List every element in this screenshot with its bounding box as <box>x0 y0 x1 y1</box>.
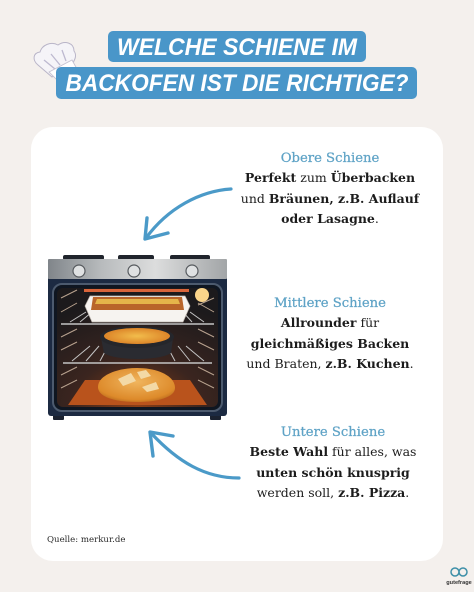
rack 1 <box>61 312 214 324</box>
oven light <box>195 288 209 302</box>
oven interior <box>57 288 218 407</box>
text block: untere Schiene: unten schön knusprig <box>256 465 410 480</box>
text block: mittlere Schiene <box>246 296 414 371</box>
text block: obere Schiene: Obere Schiene <box>281 151 379 166</box>
title line 2: BACKOFEN IST DIE RICHTIGE? <box>66 70 409 97</box>
title <box>56 31 417 99</box>
text block: untere Schiene <box>250 425 416 500</box>
arrow: to upper rack <box>145 189 231 239</box>
cake tin <box>100 326 174 359</box>
oven body <box>48 276 227 416</box>
heating element <box>84 289 189 292</box>
rack 2 <box>63 346 212 363</box>
control panel <box>48 259 227 279</box>
lasagne dish <box>85 296 190 322</box>
oven feet <box>53 414 221 420</box>
logo: gutefrage: gutefrage <box>446 580 472 586</box>
arrow: to lower rack <box>150 432 239 478</box>
source note: Quelle: merkur.de <box>47 535 125 545</box>
side rails <box>61 290 214 388</box>
text block: obere Schiene: oder Lasagne. <box>281 211 379 226</box>
panel: main card <box>31 127 443 561</box>
text block: obere Schiene: Perfekt zum Überbacken <box>245 169 415 185</box>
icon: chef hat <box>34 43 77 80</box>
illustration: oven <box>48 255 227 420</box>
oven door frame <box>53 284 222 411</box>
logo: gutefrage <box>446 568 472 586</box>
bread <box>98 368 175 402</box>
text block: untere Schiene: werden soll, z.B. Pizza. <box>257 485 409 500</box>
text block: mittlere Schiene: Mittlere Schiene <box>274 296 386 311</box>
oven floor <box>68 380 207 405</box>
text block: obere Schiene: und Bräunen, z.B. Auflauf <box>241 191 421 206</box>
text block: untere Schiene: Untere Schiene <box>281 425 385 440</box>
title line 1: WELCHE SCHIENE IM <box>117 34 358 61</box>
text block: mittlere Schiene: und Braten, z.B. Kuchen. <box>246 356 414 371</box>
text block: obere Schiene <box>241 151 421 226</box>
text block: mittlere Schiene: gleichmäßiges Backen <box>251 336 409 351</box>
knobs <box>73 265 198 277</box>
oven top vents <box>63 255 210 260</box>
text block: untere Schiene: Beste Wahl für alles, was <box>250 444 416 459</box>
text block: mittlere Schiene: Allrounder für <box>280 315 379 330</box>
